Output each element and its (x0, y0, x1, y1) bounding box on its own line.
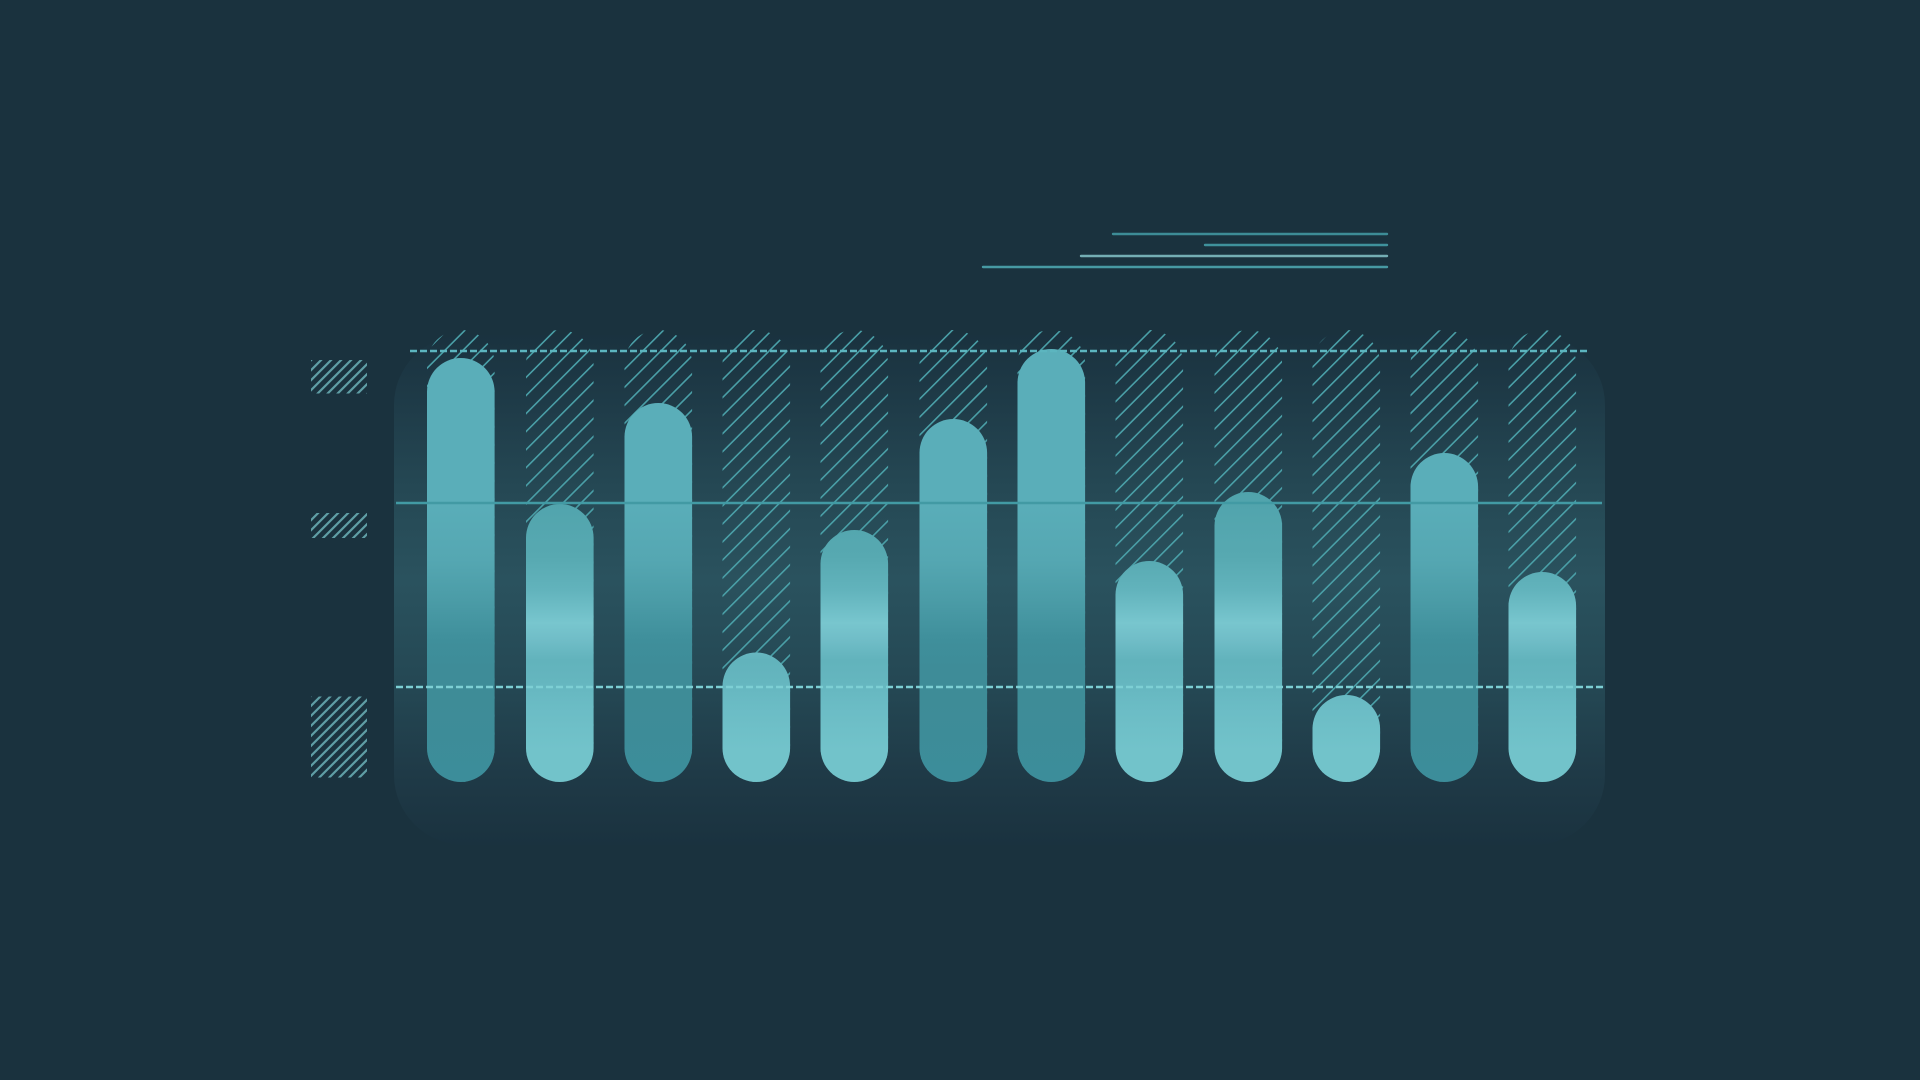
bar 12 (1508, 572, 1576, 782)
track 1 (427, 330, 495, 782)
legend swatches (311, 360, 367, 778)
reference lines (396, 351, 1603, 687)
bar 9 (1214, 492, 1282, 782)
track 10 (1312, 330, 1380, 782)
bottom dashed reference line (396, 686, 1603, 688)
line 3 (1081, 255, 1387, 257)
middle solid reference line (396, 502, 1602, 504)
bar 2 (526, 504, 594, 782)
bar 4 (722, 652, 790, 782)
top-right stacked lines (983, 234, 1387, 267)
bar 1 (427, 358, 495, 782)
bar 7 (1018, 349, 1085, 782)
panel: chart backdrop (394, 335, 1605, 845)
bar 11 (1410, 453, 1478, 782)
track 6 (920, 330, 987, 782)
legend swatch: top (311, 360, 367, 394)
track 9 (1214, 330, 1282, 782)
line 4 (983, 266, 1387, 268)
bars (427, 349, 1576, 782)
track 2 (526, 330, 594, 782)
track 11 (1410, 330, 1478, 782)
bar 6 (920, 419, 987, 782)
top dashed reference line (410, 350, 1590, 352)
bar 5 (820, 530, 888, 782)
bar 10 (1312, 695, 1380, 782)
line 2 (1205, 244, 1387, 246)
line 1 (1113, 233, 1387, 235)
track 12 (1508, 330, 1576, 782)
bar 3 (624, 403, 692, 782)
legend swatch: middle (311, 513, 367, 538)
hatched bar tracks (427, 330, 1576, 782)
bar 8 (1116, 561, 1183, 782)
track 7 (1018, 330, 1085, 782)
legend swatch: bottom (311, 696, 367, 778)
track 5 (820, 330, 888, 782)
track 3 (624, 330, 692, 782)
track 8 (1116, 330, 1183, 782)
track 4 (722, 330, 790, 782)
